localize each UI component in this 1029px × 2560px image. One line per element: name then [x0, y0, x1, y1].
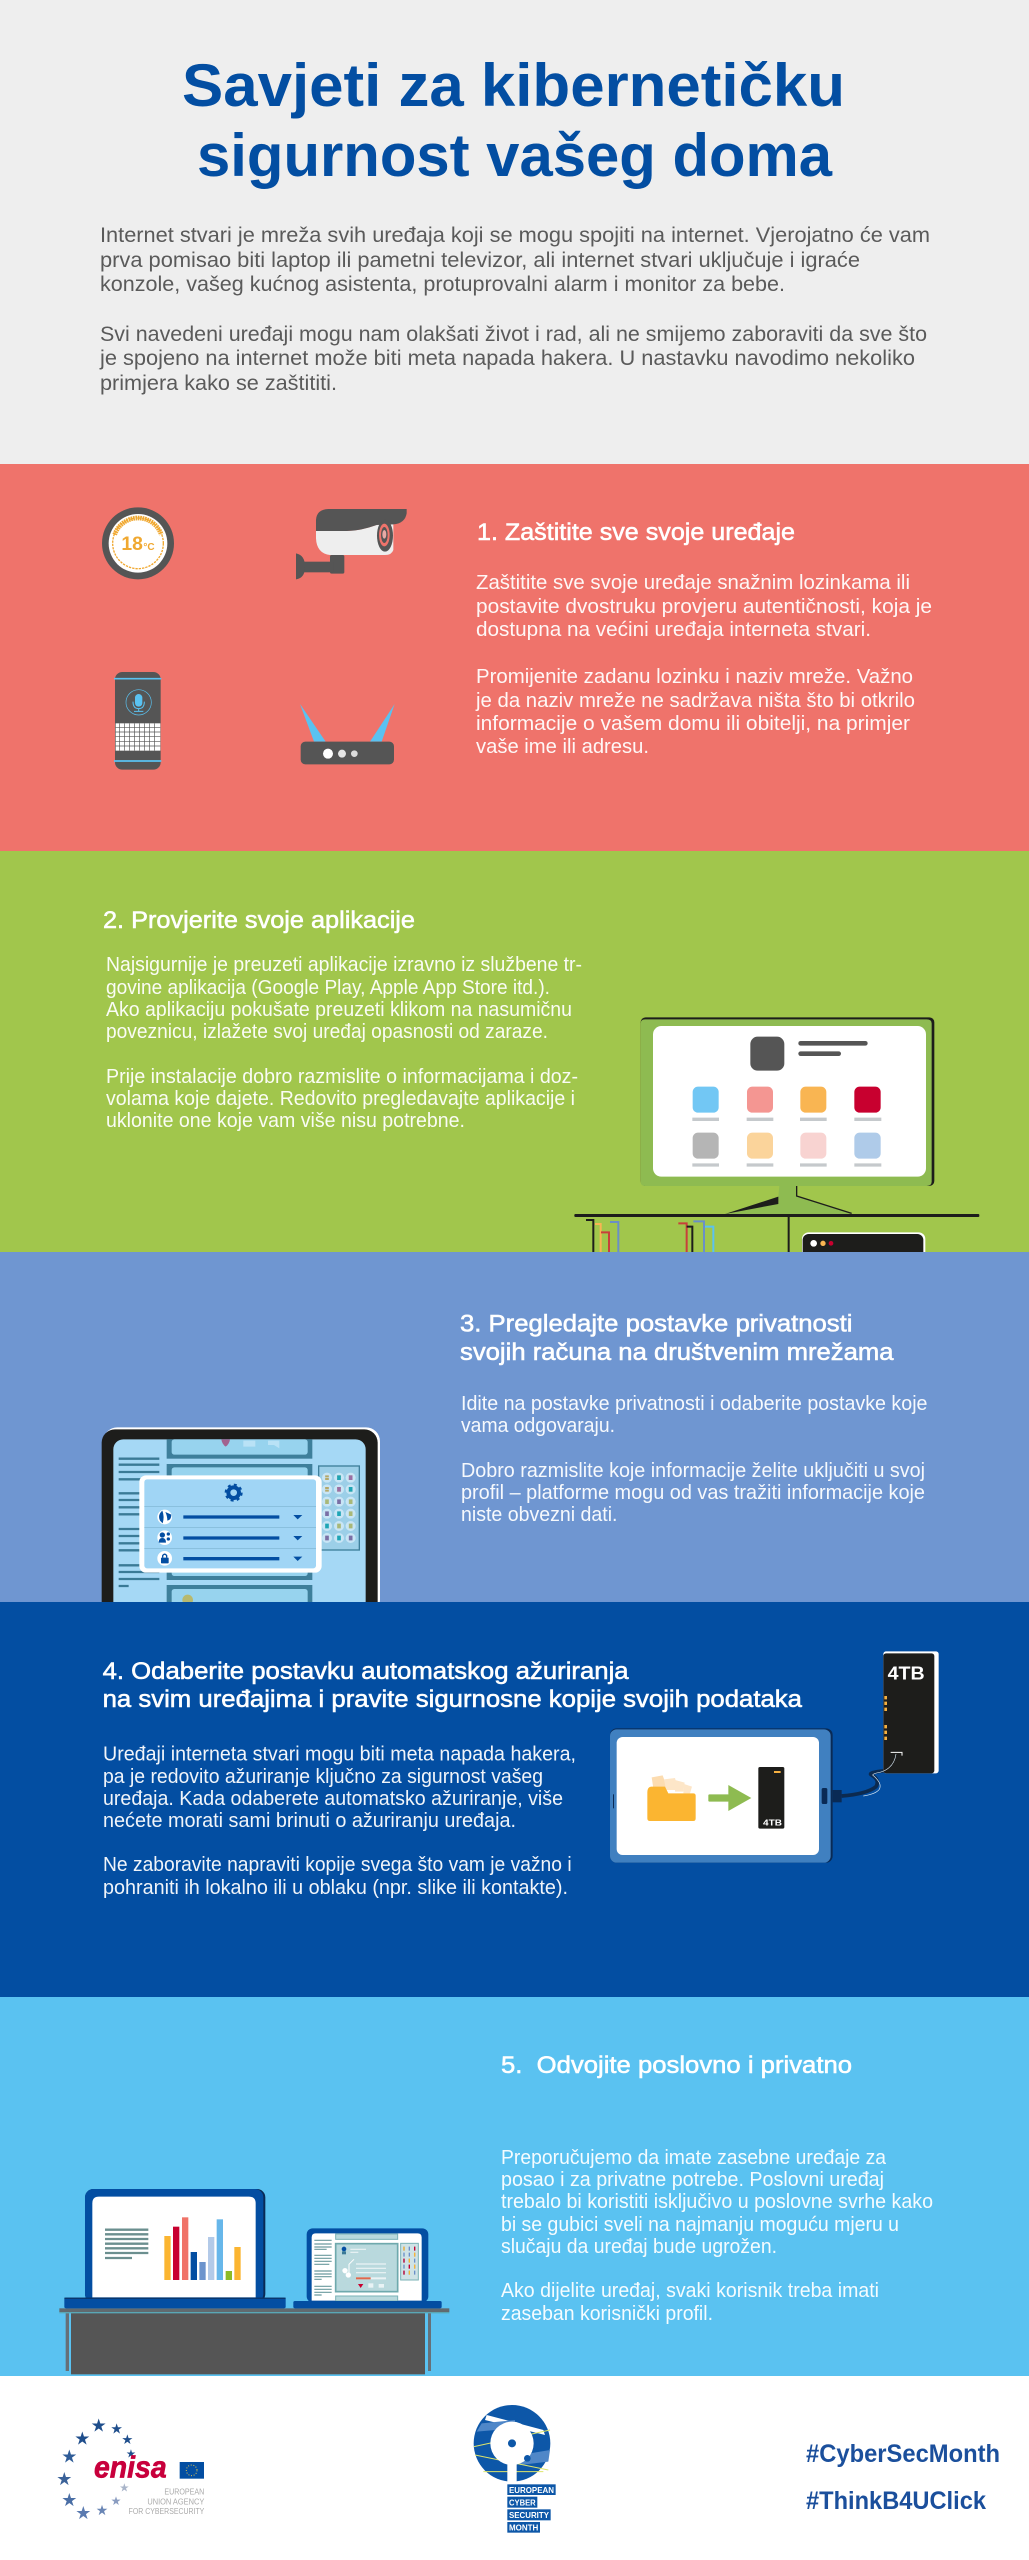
heading 1: 1. Zaštitite sve svoje uređaje	[477, 519, 795, 546]
text 3: vama odgovaraju.	[461, 1414, 615, 1437]
icon: thermostat: °C	[143, 542, 155, 553]
text 2: govine aplikacija (Google Play, Apple App Store itd.).	[106, 976, 550, 999]
heading 3	[460, 1310, 894, 1366]
intro text: Svi navedeni uređaji mogu nam olakšati život i rad, ali ne smijemo zaboraviti da sve što	[100, 323, 927, 346]
text 5: posao i za privatne potrebe. Poslovni uređaj	[501, 2168, 884, 2191]
heading 2: 2. Provjerite svoje aplikacije	[103, 907, 415, 934]
icon: star ring: ★	[61, 2447, 77, 2468]
chart: big laptop with bars	[64, 2189, 286, 2308]
intro text: je spojeno na internet može biti meta napada hakera. U nastavku navodimo nekoliko	[99, 347, 915, 370]
title	[182, 52, 845, 189]
intro text: konzole, vašeg kućnog asistenta, protuprovalni alarm i monitor za bebe.	[100, 273, 785, 296]
heading 3: 3. Pregledajte postavke privatnosti	[460, 1310, 852, 1338]
logo: ENISA: UNION AGENCY	[147, 2497, 205, 2506]
text 1: Promijenite zadanu lozinku i naziv mreže. Važno	[476, 665, 913, 688]
icon: star ring	[56, 2416, 136, 2524]
text 4: nećete morati sami brinuti o ažuriranju uređaja.	[103, 1809, 516, 1832]
text 1: je da naziv mreže ne sadržava ništa što bi otkrilo	[475, 689, 915, 712]
panel: 2 check apps	[0, 851, 1029, 1267]
text 5: slučaju da uređaj bude ugrožen.	[501, 2235, 777, 2258]
title: sigurnost vašeg doma	[197, 122, 833, 189]
text 4: Ne zaboravite napraviti kopije svega što vam je važno i	[103, 1853, 572, 1876]
text 2: poveznicu, izlažete svoj uređaj opasnosti od zaraze.	[106, 1020, 548, 1043]
text 1	[475, 571, 932, 758]
text 3: profil – platforme mogu od vas tražiti informacije koje	[461, 1481, 925, 1504]
text 2: volama koje dajete. Redovito pregledavajte aplikacije i	[106, 1087, 575, 1110]
intro text: Internet stvari je mreža svih uređaja koji se mogu spojiti na internet. Vjerojatno će vam	[100, 224, 930, 247]
icon: thermostat: 18	[121, 534, 143, 555]
text 5: zaseban korisnički profil.	[501, 2302, 713, 2325]
hashtags	[806, 2440, 1000, 2515]
text 1: informacije o vašem domu ili obitelji, na primjer	[476, 712, 910, 735]
heading 3: svojih računa na društvenim mrežama	[460, 1339, 894, 1366]
logo: ENISA: EUROPEAN	[164, 2488, 205, 2497]
icon: smart speaker	[114, 672, 161, 770]
title: Savjeti za kibernetičku	[182, 52, 845, 119]
icon: star ring: ★	[56, 2469, 72, 2490]
text 5: Preporučujemo da imate zasebne uređaje za	[501, 2146, 887, 2169]
text 5: bi se gubici sveli na najmanju moguću mjeru u	[501, 2213, 899, 2236]
illustration: tablet backing up to external drive: 4TB	[763, 1818, 782, 1828]
logo: European Cyber Security Month: SECURITY	[509, 2510, 549, 2520]
text 2: Prije instalacije dobro razmislite o informacijama i doz-	[106, 1065, 578, 1088]
logo: European Cyber Security Month: CYBER	[509, 2497, 536, 2507]
panel: footer	[0, 2376, 1029, 2560]
hashtags: #CyberSecMonth	[806, 2440, 1000, 2468]
icon: star ring: ★	[75, 2503, 91, 2524]
text 5	[501, 2146, 933, 2325]
panel: 1 protect devices	[0, 464, 1029, 851]
icon: star ring: ★	[111, 2494, 121, 2508]
text 4	[103, 1742, 576, 1899]
text 1: postavite dvostruku provjeru autentičnosti, koja je	[476, 595, 932, 618]
illustration: small laptop with social feed	[293, 2228, 442, 2308]
icon: star ring: ★	[126, 2446, 136, 2460]
icon: thermostat	[102, 507, 174, 579]
intro text: primjera kako se zaštititi.	[100, 372, 337, 395]
hashtags: #ThinkB4UClick	[806, 2487, 986, 2515]
panel: 4 auto updates and backups	[0, 1602, 1029, 1997]
logo: European Cyber Security Month	[474, 2405, 556, 2533]
text 5: Ako dijelite uređaj, svaki korisnik treba imati	[501, 2279, 879, 2302]
icon: star ring: ★	[119, 2480, 129, 2494]
icon: security camera	[296, 509, 407, 579]
logo: ENISA: enisa	[94, 2451, 167, 2485]
illustration: tablet backing up to external drive: 4TB	[888, 1662, 925, 1683]
panel: 5 separate business and private	[0, 1997, 1029, 2376]
icon: star ring: ★	[61, 2490, 77, 2511]
text 4: uređaja. Kada odaberete automatsko ažuriranje, više	[103, 1787, 563, 1810]
icon: star ring: ★	[121, 2433, 133, 2448]
logo: European Cyber Security Month: MONTH	[509, 2522, 538, 2532]
text 3: Idite na postavke privatnosti i odaberite postavke koje	[461, 1392, 928, 1415]
text 5: trebalo bi koristiti isključivo u poslovne svrhe kako	[501, 2190, 933, 2213]
heading 5: 5. Odvojite poslovno i privatno	[501, 2052, 852, 2079]
text 1: Zaštitite sve svoje uređaje snažnim lozinkama ili	[476, 571, 910, 594]
illustration: TV on shelf with app store	[574, 1017, 979, 1267]
icon: wifi router	[300, 704, 395, 764]
intro text	[99, 224, 930, 395]
logo: European Cyber Security Month: EUROPEAN	[509, 2485, 554, 2495]
icon: star ring: ★	[91, 2416, 107, 2437]
text 2: Najsigurnije je preuzeti aplikacije izravno iz službene tr-	[106, 953, 582, 976]
text 3: niste obvezni dati.	[461, 1503, 618, 1526]
icon: star ring: ★	[110, 2421, 123, 2437]
panel: introduction	[0, 0, 1029, 464]
logo: ENISA: FOR CYBERSECURITY	[129, 2507, 205, 2516]
illustration: tablet backing up to external drive	[610, 1651, 939, 1863]
illustration: tablet with privacy settings	[102, 1427, 380, 1619]
heading 4: 4. Odaberite postavku automatskog ažuriranja	[103, 1658, 629, 1685]
panel: 3 social privacy settings	[0, 1252, 1029, 1619]
logo: ENISA	[56, 2416, 205, 2524]
text 1: vaše ime ili adresu.	[476, 735, 649, 758]
text 3	[461, 1392, 928, 1526]
intro text: prva pomisao biti laptop ili pametni televizor, ali internet stvari uključuje i igraće	[100, 249, 860, 272]
text 2	[106, 953, 582, 1132]
text 2: Ako aplikaciju pokušate preuzeti klikom na nasumičnu	[106, 998, 572, 1021]
heading 4	[103, 1658, 803, 1713]
text 4: pohraniti ih lokalno ili u oblaku (npr. slike ili kontakte).	[103, 1876, 568, 1899]
icon: star ring: ★	[96, 2503, 108, 2519]
icon: star ring: ★	[74, 2429, 90, 2450]
illustration: two laptops on desk	[59, 2189, 449, 2374]
text 1: dostupna na većini uređaja interneta stvari.	[476, 618, 871, 641]
text 4: Uređaji interneta stvari mogu biti meta napada hakera,	[103, 1742, 576, 1766]
heading 4: na svim uređajima i pravite sigurnosne kopije svojih podataka	[103, 1686, 803, 1713]
text 3: Dobro razmislite koje informacije želite uključiti u svoj	[461, 1459, 925, 1482]
text 2: uklonite one koje vam više nisu potrebne.	[106, 1109, 465, 1132]
text 4: pa je redovito ažuriranje ključno za sigurnost vašeg	[103, 1765, 543, 1788]
